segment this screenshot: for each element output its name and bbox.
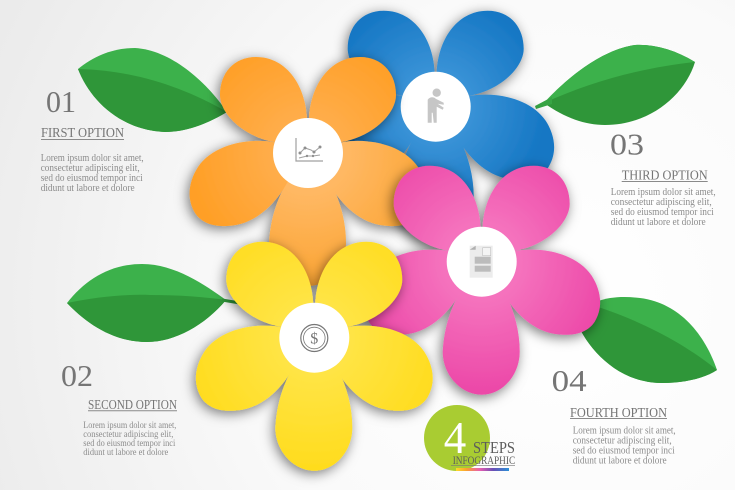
circle: pink hub	[447, 227, 517, 297]
block: 01 first option: consectetur adipiscing elit,	[41, 163, 140, 174]
block: 01 first option	[41, 84, 144, 194]
icon: person	[428, 88, 444, 123]
block: 01 first option: FIRST OPTION	[41, 126, 124, 141]
leaf: fourth option	[575, 297, 717, 383]
flower: orange	[190, 57, 426, 286]
block: 01 first option: 01	[46, 84, 76, 119]
badge: 4 steps infographic	[424, 405, 515, 471]
block: 01 first option: Lorem ipsum dolor sit amet,	[41, 153, 144, 164]
leaf: third option	[535, 45, 695, 125]
leaf: second option	[67, 264, 240, 342]
block: 03 third option: consectetur adipiscing elit,	[611, 197, 712, 208]
block: 03 third option: didunt ut labore et dolore	[611, 217, 706, 228]
block: 04 fourth option: didunt ut labore et dolore	[573, 456, 667, 466]
block: 03 third option	[610, 126, 716, 228]
icon: document	[470, 246, 493, 278]
block: 01 first option: sed do eiusmod tempor inci	[41, 173, 143, 184]
flower: pink	[363, 166, 600, 395]
badge: 4 steps infographic: STEPS	[473, 438, 515, 457]
icon: dollar coin	[301, 324, 328, 352]
block: 03 third option: THIRD OPTION	[622, 168, 708, 184]
block: 04 fourth option	[552, 363, 676, 466]
block: 04 fourth option: FOURTH OPTION	[570, 406, 667, 421]
block: 02 second option: Lorem ipsum dolor sit amet,	[83, 420, 176, 430]
circle: orange hub	[273, 118, 343, 188]
block: 02 second option: sed do eiusmod tempor inci	[83, 438, 176, 448]
block: 04 fourth option: Lorem ipsum dolor sit amet,	[573, 426, 676, 436]
icon: dollar coin: $	[310, 331, 318, 348]
block: 02 second option: 02	[61, 358, 93, 393]
block: 03 third option: sed do eiusmod tempor inci	[611, 207, 714, 218]
badge: 4 steps infographic: INFOGRAPHIC	[453, 455, 515, 467]
block: 02 second option	[61, 358, 177, 457]
badge: 4 steps infographic: 4	[444, 413, 466, 463]
leaf: first option	[78, 48, 227, 132]
circle: yellow hub	[279, 303, 349, 373]
block: 04 fourth option: 04	[552, 363, 587, 398]
block: 01 first option: didunt ut labore et dolore	[41, 183, 135, 194]
block: 03 third option: Lorem ipsum dolor sit amet,	[611, 187, 716, 198]
icon: line chart	[296, 138, 323, 161]
flower: blue	[317, 11, 554, 240]
circle: blue hub	[401, 72, 471, 142]
block: 03 third option: 03	[610, 126, 644, 162]
block: 04 fourth option: consectetur adipiscing elit,	[573, 436, 672, 446]
block: 02 second option: consectetur adipiscing elit,	[83, 429, 173, 439]
block: 04 fourth option: sed do eiusmod tempor inci	[573, 446, 675, 456]
flower: yellow	[196, 242, 433, 471]
block: 02 second option: didunt ut labore et dolore	[83, 447, 168, 457]
block: 02 second option: SECOND OPTION	[88, 398, 177, 413]
